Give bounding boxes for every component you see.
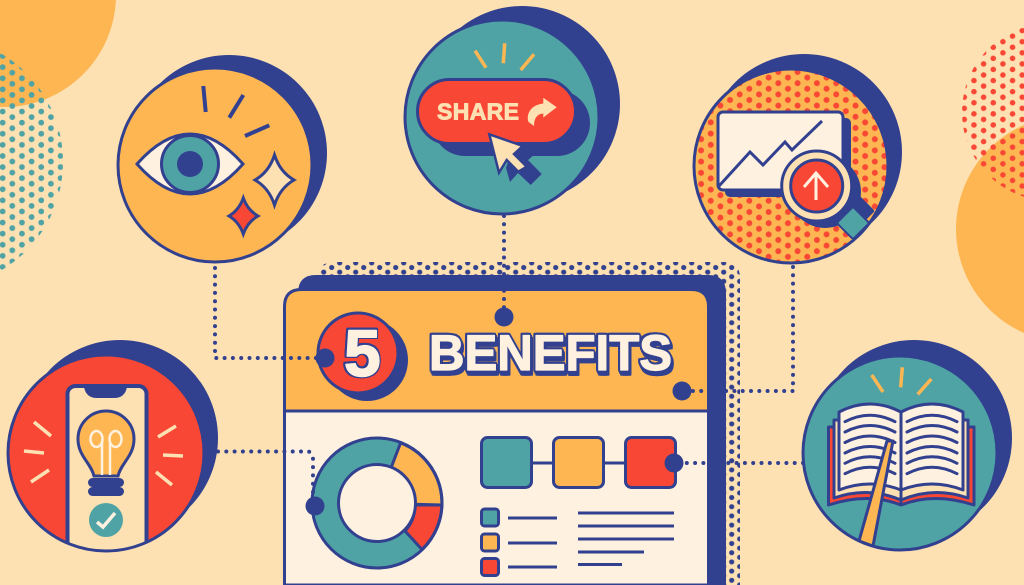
icon: check badge	[89, 503, 123, 537]
icon: book text lines	[845, 415, 957, 474]
icon: screen	[718, 112, 843, 190]
decorative circles: right	[956, 23, 1024, 342]
icon: eye circle	[118, 68, 312, 262]
decorative circles: top left	[0, 0, 116, 288]
icon: small sparkle	[229, 198, 258, 234]
icon: rays	[203, 86, 269, 136]
legend swatches and lines	[482, 509, 557, 576]
card header	[284, 290, 708, 585]
cursor	[489, 134, 527, 173]
icon: circle outline	[803, 356, 997, 550]
text lines	[578, 513, 674, 564]
icon: rays	[872, 367, 931, 394]
icon: magnifier	[782, 151, 875, 239]
share button shadow	[432, 90, 590, 156]
icon: phone	[66, 384, 148, 550]
navy bubble: eye	[131, 55, 327, 251]
icon: rays	[475, 43, 534, 70]
icon: book circle	[803, 356, 997, 550]
icon: eye	[137, 134, 243, 194]
connector: book to squares	[664, 454, 803, 472]
share label: SHARE	[437, 98, 519, 124]
donut chart	[312, 438, 442, 568]
share arrow	[528, 98, 557, 126]
icon: chart circle	[694, 69, 888, 263]
icon: open book	[828, 404, 974, 505]
flow of three squares	[482, 438, 676, 488]
navy bubble: share	[424, 6, 620, 202]
icon: large sparkle	[255, 155, 294, 205]
navy bubble: book	[816, 340, 1012, 536]
icon: rays	[24, 422, 183, 485]
connector: chart to header	[672, 267, 793, 400]
icon: screen shadow	[725, 118, 851, 197]
navy bubble: bulb	[22, 340, 218, 536]
heading: benefits: BENEFITS	[429, 325, 672, 381]
panel: benefits card	[284, 290, 708, 585]
badge: number 5: 5	[344, 316, 381, 390]
icon: circle outline	[8, 355, 204, 551]
card body	[284, 411, 708, 585]
navy bubble: chart	[706, 54, 902, 250]
badge: number 5	[318, 313, 408, 401]
icon: share circle	[405, 20, 599, 214]
icon: bulb circle	[6, 356, 202, 552]
icon: light bulb	[78, 411, 134, 496]
card navy shadow	[298, 275, 726, 585]
share button	[418, 80, 576, 144]
connector: eye to badge	[215, 268, 334, 368]
icon: trend line	[719, 121, 822, 186]
halftone card shadow	[318, 262, 740, 585]
icon: pointer	[859, 441, 893, 546]
cursor shadow	[506, 150, 542, 185]
connector: bulb to donut	[218, 452, 324, 516]
connector: share to header	[494, 216, 514, 326]
